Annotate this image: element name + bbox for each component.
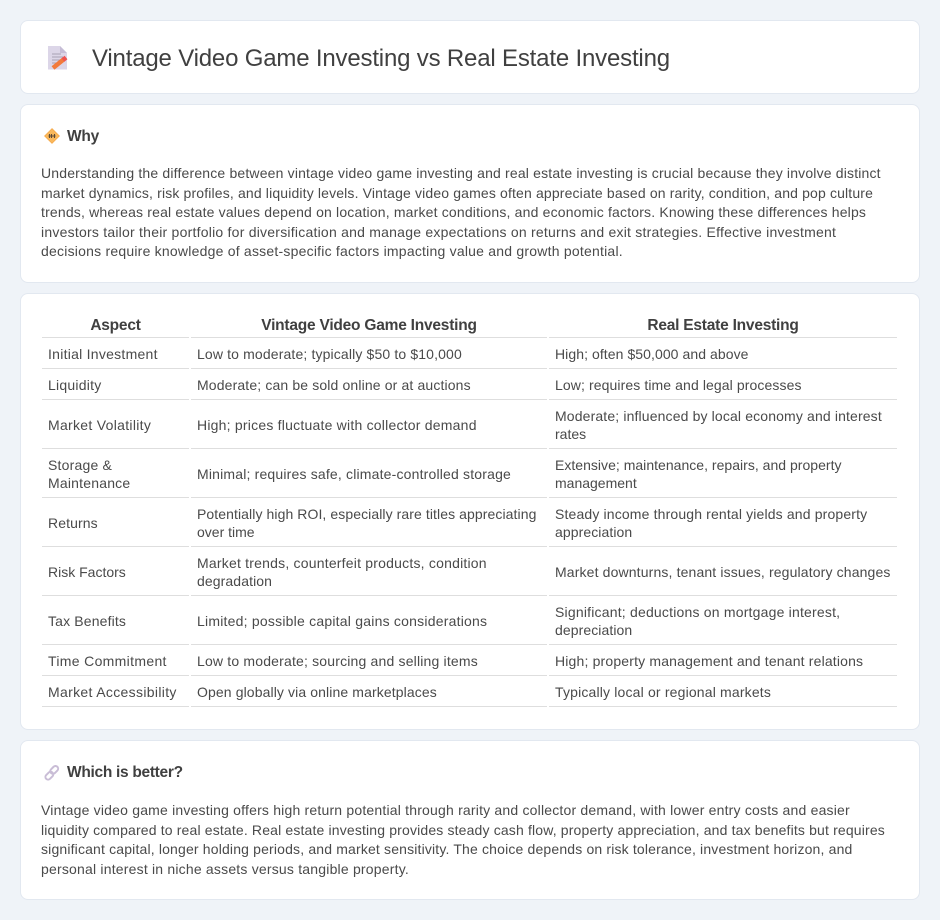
table header: vintage video game investing: Vintage Video Game Investing <box>261 317 477 334</box>
row: returns: Returns <box>48 515 98 531</box>
panel: comparison table: Typically local or regional markets <box>555 684 771 700</box>
panel: comparison table: High; prices fluctuate with collector demand <box>197 417 477 433</box>
text block: why paragraph: decisions require knowledge of asset-specific factors impacting value and growth potential. <box>41 243 623 259</box>
text block: which is better paragraph: Vintage video game investing offers high return potential through rarity and collector demand, with lower entry costs and easier <box>41 802 850 818</box>
text block: why paragraph: market dynamics, risk profiles, and liquidity levels. Vintage video games often appreciate based on rarity, condition, and pop culture <box>41 184 873 200</box>
panel: comparison table: Extensive; maintenance, repairs, and property <box>555 457 842 473</box>
row: time commitment: Time Commitment <box>48 653 167 669</box>
panel: comparison table: Limited; possible capital gains considerations <box>197 613 487 629</box>
panel: comparison table: Low to moderate; sourcing and selling items <box>197 653 478 669</box>
text block: which is better paragraph: liquidity compared to real estate. Real estate investing provides steady cash flow, property appreciation, and tax benefits but requires <box>41 822 885 838</box>
row: initial investment: Initial Investment <box>48 346 158 362</box>
row: storage and maintenance <box>48 457 130 491</box>
icon: chain link <box>44 765 60 781</box>
panel: comparison table: over time <box>197 524 255 540</box>
row: risk factors: Risk Factors <box>48 564 126 580</box>
panel: comparison table: Open globally via online marketplaces <box>197 684 437 700</box>
row: storage and maintenance: Storage & <box>48 457 112 473</box>
panel: title card <box>20 20 920 94</box>
text block: which is better paragraph: personal interest in niche assets versus tangible property. <box>41 860 409 876</box>
panel: which is better <box>20 740 920 900</box>
panel: comparison table: depreciation <box>555 622 632 638</box>
text block: why paragraph: Understanding the difference between vintage video game investing and real estate investing is crucial because they involve distinct <box>41 165 881 181</box>
panel: comparison table: High; property management and tenant relations <box>555 653 863 669</box>
row: storage and maintenance: Maintenance <box>48 475 130 491</box>
heading: why: Why <box>67 128 99 145</box>
panel: comparison table: Moderate; can be sold online or at auctions <box>197 377 471 393</box>
table header: real estate investing: Real Estate Investing <box>647 317 799 334</box>
panel: comparison table: management <box>555 475 637 491</box>
panel: comparison table: Moderate; influenced by local economy and interest <box>555 408 882 424</box>
panel: comparison table: Low; requires time and legal processes <box>555 377 802 393</box>
panel: comparison table <box>20 293 920 730</box>
panel: comparison table: rates <box>555 426 586 442</box>
panel: why <box>20 104 920 283</box>
panel: comparison table: Potentially high ROI, especially rare titles appreciating <box>197 506 536 522</box>
panel: comparison table: Significant; deductions on mortgage interest, <box>555 604 840 620</box>
heading: which is better: Which is better? <box>67 764 183 781</box>
row: market accessibility: Market Accessibility <box>48 684 177 700</box>
row: market volatility: Market Volatility <box>48 417 151 433</box>
table header: aspect: Aspect <box>90 317 141 334</box>
row: liquidity: Liquidity <box>48 377 101 393</box>
panel: comparison table: Low to moderate; typically $50 to $10,000 <box>197 346 462 362</box>
icon: document with pencil <box>48 46 68 70</box>
text block: why paragraph: trends, whereas real estate values depend on location, market conditions, and economic factors. Knowing these differences helps <box>41 204 866 220</box>
text block: which is better paragraph <box>41 802 885 877</box>
text block: which is better paragraph: significant capital, longer holding periods, and market sensitivity. The choice depends on risk tolerance, investment horizon, and <box>41 841 852 857</box>
panel: comparison table: degradation <box>197 573 272 589</box>
panel: comparison table: Minimal; requires safe, climate-controlled storage <box>197 466 511 482</box>
panel: comparison table: High; often $50,000 and above <box>555 346 749 362</box>
row: tax benefits: Tax Benefits <box>48 613 126 629</box>
text block: why paragraph <box>41 165 881 259</box>
panel: comparison table: Market downturns, tenant issues, regulatory changes <box>555 564 891 580</box>
panel: comparison table: appreciation <box>555 524 632 540</box>
title: Vintage Video Game Investing vs Real Estate Investing <box>92 45 670 72</box>
text block: why paragraph: investors tailor their portfolio for diversification and manage expectations on returns and exit strategies. Effective investment <box>41 224 836 240</box>
panel: comparison table: Market trends, counterfeit products, condition <box>197 555 487 571</box>
icon: warning diamond <box>44 128 60 144</box>
panel: comparison table: Steady income through rental yields and property <box>555 506 867 522</box>
